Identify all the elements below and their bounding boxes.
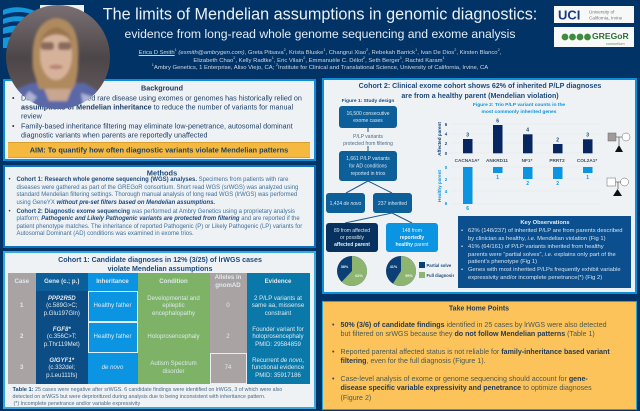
pie: affected parent: 38% [341,265,349,269]
panel: take home points [322,301,637,410]
table: candidate diagnoses: holoprosencephaly [252,333,304,340]
table: candidate diagnoses: Developmental and [147,295,200,302]
background bullets: diagnostic variants when parents are reportedly unaffected [21,130,207,140]
key observations bullets [461,228,623,281]
connectors [345,128,412,223]
table: candidate diagnoses: Evidence [265,278,291,285]
box: 1,661 variants [339,151,397,181]
table: candidate diagnoses: (c.356C>T; [47,333,77,340]
table: candidate diagnoses: 74 [225,364,231,371]
logo: UCI: UCI [558,7,580,22]
table: candidate diagnoses: 2 [226,333,230,340]
bar values: affected parent: 3 [586,132,589,138]
bars: affected parent [463,125,592,153]
axis title: affected parent: Affected parent [437,122,442,156]
table: candidate diagnoses: Healthy father [94,302,131,309]
authors [138,48,501,71]
logo: GREGoR: consortium [606,42,625,46]
table caption [12,386,282,407]
table: candidate diagnoses: Inheritance [96,278,129,285]
legend: Partial solve [426,263,452,268]
table: candidate diagnoses: PPP2R5D [48,295,76,302]
header logo: Ambry waves [3,7,34,48]
table: candidate diagnoses: functional evidence [252,364,304,371]
methods text: diseases were gathered as part of the GREGoR consortium. Short read WGS (srWGS) was analyzed using [16,184,298,190]
key observations bullets: • [461,244,463,250]
bar values: healthy parent: 6 [466,206,469,212]
take home bullets: but filtered on srWGS because they do not follow Mendelian patterns (Table 1) [340,330,595,338]
pie: affected parent: 62% [355,274,363,278]
methods text: using GeneYX without pre-set filters based on Mendelian assumptions. [16,200,215,206]
table: candidate diagnoses: encephalopathy [152,310,195,317]
key observations heading: Key Observations [520,220,570,226]
legend [419,262,455,278]
table: candidate diagnoses: PMID: 29584859 [255,341,301,348]
background bullets: assumptions of Mendelian inheritance to reduce the number of variants for manual [21,102,293,112]
table: candidate diagnoses [8,273,310,384]
table: candidate diagnoses: 0 [226,302,230,309]
title: The limits of Mendelian assumptions in genomic diagnostics: [103,6,537,24]
table: candidate diagnoses: Condition [159,278,188,285]
bar values: affected parent: 3 [466,132,469,138]
pie: healthy parent: 59% [405,274,413,278]
figure 1: study design flowchart [326,98,454,286]
label: protected from filtering [343,134,393,147]
table caption: Table 1: 25 cases were negative after srWGS. 6 candidate findings were identified on lrWGS, 3 of which were also [12,386,282,392]
methods text: standard Mendelian filtering settings. Thorough manual analysis of long read WGS (lrWGS) was performed [16,192,297,198]
legend: Full diagnosis [426,273,454,278]
axis title: healthy parent: Healthy parent [437,170,442,202]
background bullets: • [12,121,15,130]
bar values: affected parent: 4 [526,128,529,134]
table: candidate diagnoses: same aa, missense [252,302,304,309]
key observations bullets: 62% (148/237) of inherited P/LP are from parents described [468,228,623,234]
background bullets: Diagnosis of suspected rare disease using exomes or genomes has historically relied on [21,93,302,102]
bar values: healthy parent: 1 [586,175,589,181]
logo: GREGoR: GREGoR [592,31,629,41]
box: affected parent [326,223,378,252]
pedigree: affected parent [608,133,630,152]
bars: healthy parent [463,167,592,204]
key observations bullets: 41% (64/161) of P/LP variants inherited from healthy [468,244,604,250]
figure 1 title: Figure 1: Study design [342,98,394,104]
axis ticks: 4 [445,189,448,194]
bar values: affected parent [466,118,589,144]
box: healthy parent [386,223,438,252]
logo: UCI: California, Irvine [589,15,622,20]
box: affected parent: affected parent [334,242,370,248]
axis ticks: 6 [445,122,448,127]
table: candidate diagnoses: Gene (c.; p.) [44,278,79,285]
axis ticks: 2 [445,141,448,146]
box: 16,500 exomes: exome cases [353,118,383,124]
cohort 1 heading: violate Mendelian assumptions [108,265,212,273]
axis ticks: 2 [445,177,448,182]
gene labels: ANKRD11 [486,158,508,163]
axis ticks: 0 [445,165,448,170]
background bullets [12,93,302,140]
box: 1,661 variants: 1,661 P/LP variants [346,156,390,162]
table: candidate diagnoses: Healthy father [94,333,131,340]
table: candidate diagnoses: gnomAD [215,282,241,288]
table caption: detected on srWGS but were deprioritized during analysis due to being inconsistent with inheritance pattern. [12,394,265,400]
panel: methods [3,165,316,248]
pedigree: healthy parent [607,178,628,196]
bar values: healthy parent: 1 [496,175,499,181]
gene labels: PRRT2 [549,158,565,163]
axis ticks: 0 [445,151,448,156]
figure 2 title: Figure 2: Trio P/LP variant counts in the [473,102,565,108]
box: healthy parent: reportedly [400,235,424,241]
take home bullets: Case-level analysis of exome or genome sequencing should account for gene- [340,375,588,383]
header white tab behind photo [40,5,84,15]
table: candidate diagnoses: Recurrent de novo, [252,357,304,364]
table: candidate diagnoses: Case [14,278,29,285]
aim banner: AIM: To quantify how often diagnostic variants violate Mendelian patterns [30,146,288,154]
table: candidate diagnoses: 1 [20,302,23,309]
background heading: Background [141,84,183,92]
table: candidate diagnoses: Holoprosencephaly [147,333,200,340]
box: affected parent: or possibly [340,235,364,241]
table: candidate diagnoses: (c.589G>C; [46,302,77,309]
key observations bullets: parents were “partial solves”, i.e. explains only part of the [468,252,616,258]
panel: cohort 1 [3,251,316,409]
table: candidate diagnoses: FGF8* [53,326,71,333]
panel: key observations [458,216,631,288]
methods text: patient phenotype matches. The inheritance of reported Pathogenic (P) or Likely Pathogenic (LP) variants for [16,224,302,230]
label: protected from filtering: P/LP variants [353,134,383,140]
key observations bullets: patient’s phenotype (Fig 1) [468,259,537,265]
table: candidate diagnoses: (c.332del; [48,364,75,371]
take home bullets: • [332,375,334,383]
key observations bullets: by clinician as healthy, i.e. Mendelian violation (Fig 1) [468,236,606,242]
methods text: Cohort 2: Diagnostic exome sequencing was performed at Ambry Genetics using a proprietary analysis [16,208,295,214]
take home bullets: • [332,348,334,356]
box: affected parent: 89 from affected [334,228,370,234]
take home bullets: • [332,321,334,329]
aim banner [8,142,310,158]
presenter photo [6,5,110,109]
table: candidate diagnoses: p.Leu111fs) [46,372,77,379]
gene labels: CACNA1A* [455,158,480,163]
axis ticks: 6 [445,201,448,206]
box: inherited: 237 inherited [378,201,407,207]
box: de novo [326,193,365,213]
methods text: • [8,208,11,214]
key observations bullets: Genes with most inherited P/LPs frequently exhibit variable [468,267,621,273]
methods text: platform; Pathogenic and Likely Pathogenic variants are protected from filtering and are reported if the [16,216,300,222]
pie: healthy parent [386,256,416,286]
methods text: Autosomal Dominant (AD) conditions was examined in exome trios. [16,231,194,237]
logo: UCI: University of [589,9,614,14]
background bullets: Family-based inheritance filtering may eliminate low-penetrance, autosomal dominant [21,121,293,130]
table: candidate diagnoses: PMID: 35917186 [255,372,301,379]
axis ticks [445,122,448,206]
cohort 2 heading: are from a healthy parent (Mendelian violation) [401,92,559,100]
background bullets: review [21,112,42,120]
box: 16,500 exomes: 16,500 consecutive [346,111,390,117]
authors: Elizabeth Chao2, Kelly Radtke1, Eric Vilain2, Emmanuèle C. Délot2, Seth Berger1, Rachid Karam1 [193,56,445,64]
table: candidate diagnoses: epileptic [162,302,185,309]
pie: healthy parent: 41% [390,265,398,269]
authors: Erica D Smith1 (esmith@ambrygen.com), Greta Pitsava2, Krista Bluske1, Changrui Xiao2, Rebekah Barrick1, Ivan De Dios2, Kirsten Blanco2, [139,48,501,56]
table: candidate diagnoses: constraint [265,310,291,317]
axis ticks: 4 [445,132,448,136]
box: healthy parent: healthy parent [395,242,429,248]
box: 16,500 exomes [339,106,397,128]
table: candidate diagnoses: 2 [20,333,23,340]
methods text: Cohort 1: Research whole genome sequencing (WGS) analyses. Specimens from patients with rare [16,177,288,183]
table: candidate diagnoses: 2 P/LP variants at [254,295,302,302]
authors: 1Ambry Genetics, 1 Enterprise, Aliso Viejo, CA; 2Institute for Clinical and Translational Science, University of California, Irvine, CA [152,63,488,71]
logo: GREGoR [554,27,634,47]
take home bullets: filtering, even for the full diagnosis (Figure 1). [340,357,486,365]
panel: cohort 2 [322,78,637,294]
take home bullets: Reported parental affected status is not reliable for family-inheritance based variant [340,348,610,356]
box: inherited [373,193,412,213]
table: candidate diagnoses: Autism Spectrum [150,360,197,367]
pie: affected parent [337,256,367,286]
bar values: affected parent: 6 [496,118,499,124]
table: candidate diagnoses: 3 [20,364,23,371]
figure 2: trio variant counts bar chart: most commonly inherited genes [481,109,557,115]
box: 1,661 variants: reported in trios [351,171,386,177]
label: protected from filtering: protected from filtering [343,141,393,147]
key observations bullets: expressivity and/or incomplete penetrance(*) (Fig 2) [468,275,602,281]
table: candidate diagnoses: disorder [162,368,184,375]
key observations bullets: • [461,267,463,273]
cohort 1 heading: Cohort 1: Candidate diagnoses in 12% (3/25) of lrWGS cases [58,256,262,264]
logo: UCI [554,6,634,23]
methods text [8,176,302,237]
box: healthy parent: 148 from [402,228,422,234]
subtitle: evidence from long-read whole genome sequencing and exome analysis [125,26,515,40]
key observations bullets: • [461,228,463,234]
panel: background [3,79,316,161]
methods text: • [8,177,11,183]
bar values: affected parent: 2 [556,138,559,144]
figure 2: trio variant counts bar chart [437,102,630,212]
table: candidate diagnoses: p.Glu197Gln) [44,310,80,317]
table caption: (*) Incomplete penetrance and/or variable expressivity [14,401,140,407]
take home bullets: 50% (3/6) of candidate findings identified in 25 cases by lrWGS were also detected [340,321,607,329]
table: candidate diagnoses: Founder variant for [252,326,304,333]
table: candidate diagnoses: p.Thr119Met) [44,341,80,348]
methods heading: Methods [147,168,177,177]
table: candidate diagnoses: de novo [102,364,123,371]
take home bullets: (Figure 2) [340,394,371,402]
table: candidate diagnoses: Alleles in [215,274,241,281]
box: de novo: 1,424 de novo [330,201,362,207]
take home heading: Take Home Points [449,305,509,312]
gene labels: NF1* [522,158,533,163]
bar values: healthy parent: 2 [526,181,529,187]
box: 1,661 variants: for AD conditions [349,164,387,170]
gene labels: COL2A1* [577,158,597,163]
table: candidate diagnoses: GIGYF1* [49,357,74,364]
bar values: healthy parent: 2 [556,181,559,187]
background bullets: • [12,93,15,102]
cohort 1 heading [58,256,262,273]
gene labels [455,158,597,163]
cohort 2 heading: Cohort 2: Clinical exome cohort shows 62% of inherited P/LP diagnoses [359,82,601,90]
bar values: healthy parent [466,175,589,212]
take home bullets: disease specific variable expressivity and penetrance to optimize diagnoses [340,384,592,392]
take home bullets [332,321,610,402]
cohort 2 heading [358,82,601,100]
